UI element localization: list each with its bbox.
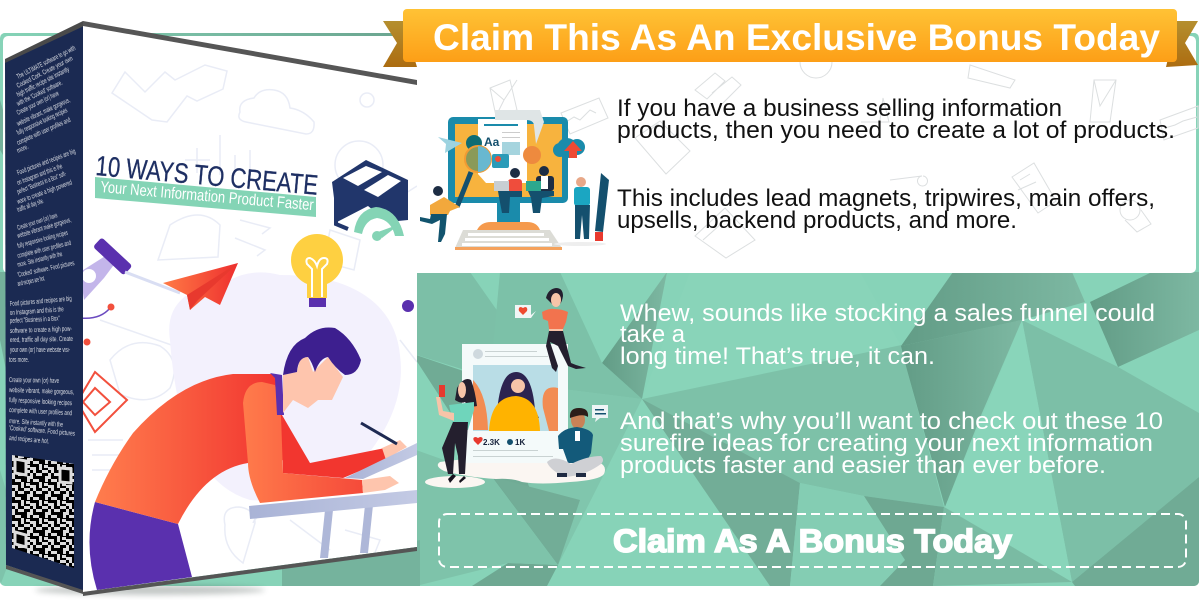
side text: complete with user profiles and [17, 240, 72, 260]
lavender blob [169, 272, 401, 501]
torso [95, 374, 285, 524]
side text: software to create a high pow- [10, 326, 72, 335]
title: Claim This As An Exclusive Bonus Today [433, 17, 1160, 58]
post card [462, 344, 568, 463]
hands [382, 440, 407, 460]
box front panel [77, 24, 417, 592]
side text: ered, traffic all day site. Create [10, 336, 73, 344]
text block: intro: upsells, backend products, and more. [617, 207, 1017, 234]
side text: more. [16, 144, 30, 155]
icon: social media illustration [425, 288, 608, 488]
side text: Create your own (or) have [9, 377, 59, 385]
side text: more. Site instantly with the [9, 418, 63, 429]
product title: 10 WAYS TO CREATE [94, 150, 319, 201]
person: sitting man [547, 408, 603, 477]
side text: website vibrant make gorgeous, [16, 217, 72, 240]
person drawing [89, 327, 407, 590]
side text: complete with user profiles and [9, 407, 72, 417]
text block: funnel explanation: products faster and easier than ever before. [620, 452, 1106, 479]
back arm [282, 415, 386, 478]
box top edge [83, 21, 417, 85]
side text: tors more. [9, 357, 29, 364]
QR code [12, 455, 74, 568]
banner tail left [383, 21, 417, 67]
side text: and recipes are hot. [17, 275, 46, 288]
side text: website vibrant, make gorgeous, [8, 387, 74, 396]
monitor [448, 117, 568, 250]
side text: Food pictures and recipes are big [16, 148, 77, 177]
panel: white intro panel [3, 36, 1196, 273]
person: sitting man [526, 166, 554, 213]
side text: high traffic recipe site instantly [16, 66, 71, 99]
side text: fully responsive looking recipes [17, 230, 69, 250]
text block: intro: If you have a business selling information [617, 95, 1062, 122]
side text: Create your own (or) have [16, 212, 59, 232]
cloud upload [553, 138, 585, 158]
hair [283, 327, 361, 375]
box shadow [35, 585, 265, 595]
side text: and recipes are hot. [9, 435, 49, 445]
side text: Food pictures and recipes are big [10, 296, 72, 308]
paper plane [438, 137, 462, 153]
side text: complete with user profiles and [16, 117, 72, 147]
icon: pen tool [80, 237, 180, 346]
side text: on Instagram and this is the [10, 306, 64, 317]
ground shapes [425, 458, 605, 488]
document: Aa [484, 135, 500, 149]
side text: 'Cooked' software. Food pictures [17, 260, 75, 279]
side text: 'Cooked' software. Food pictures [9, 425, 76, 438]
call to action button: Claim As A Bonus Today [613, 523, 1012, 559]
text block: funnel explanation: Whew, sounds like stocking a sales funnel could [620, 300, 1155, 327]
banner tail right [1166, 21, 1198, 67]
banner [403, 9, 1177, 62]
diamond [77, 372, 127, 432]
collar [270, 373, 284, 415]
side text: perfect "Business in a Box" [10, 315, 60, 325]
call to action button [439, 514, 1186, 567]
speech bubble [592, 405, 608, 422]
side text: website vibrant, make gorgeous, [15, 97, 71, 128]
side text: The ULTIMATE software to go with [16, 45, 77, 81]
face [283, 357, 343, 413]
product title: Your Next Information Product Faster [100, 179, 315, 214]
text block: funnel explanation [620, 300, 1163, 479]
text block: funnel explanation: take a [620, 321, 686, 348]
side text: Cooked Cork. Create your own [16, 55, 74, 90]
front doodles [88, 65, 417, 563]
side text: ware to create a high powered [16, 179, 73, 206]
text block: intro [617, 95, 1175, 234]
side text: perfect "Business in a Box" soft- [16, 171, 68, 196]
person: sitting on card [542, 288, 586, 372]
side text: with the 'Cooked' software. [15, 80, 64, 108]
icon: computer team illustration [420, 110, 609, 250]
trousers [89, 502, 192, 590]
drawing table [249, 443, 417, 558]
person: sitting woman [494, 168, 522, 213]
icon: package with gauge [332, 160, 408, 241]
side text: fully responsive looking recipes [9, 397, 72, 407]
background line icons [490, 62, 1198, 258]
person: standing man with pencil [554, 173, 609, 246]
person: woman with magnifier [420, 186, 460, 242]
icon: light bulb [291, 234, 343, 307]
box bottom edge [83, 547, 417, 596]
box side panel [5, 21, 84, 594]
front arm [243, 382, 363, 503]
text block: funnel explanation: surefire ideas for creating your next information [620, 430, 1153, 457]
side text: traffic all day site. [16, 198, 45, 214]
text block: funnel explanation: And that’s why you’ll want to check out these 10 [620, 408, 1163, 435]
text block: intro: This includes lead magnets, tripwires, main offers, [617, 185, 1155, 212]
person: selfie woman [436, 379, 477, 483]
side text [8, 45, 77, 445]
post card: 2.3K [483, 438, 500, 447]
icon: paper plane [163, 263, 238, 310]
pen [361, 423, 397, 444]
magnifier [457, 135, 491, 207]
product box [5, 21, 417, 596]
post card: 1K [515, 438, 525, 447]
side text: on Instagram and this is the [16, 163, 64, 187]
side text: more. Site instantly with the [17, 251, 63, 269]
document [478, 110, 544, 183]
product title [94, 150, 319, 217]
text block: intro: products, then you need to create a lot of products. [617, 117, 1175, 144]
speech heart [515, 305, 536, 318]
side text: fully responsive looking recipes [16, 107, 69, 137]
side text: Create your own (or) have [16, 90, 60, 117]
text block: funnel explanation: long time! That’s true, it can. [620, 343, 935, 370]
purple dot [402, 300, 414, 312]
side text: your own (or) have website visi- [10, 347, 70, 354]
